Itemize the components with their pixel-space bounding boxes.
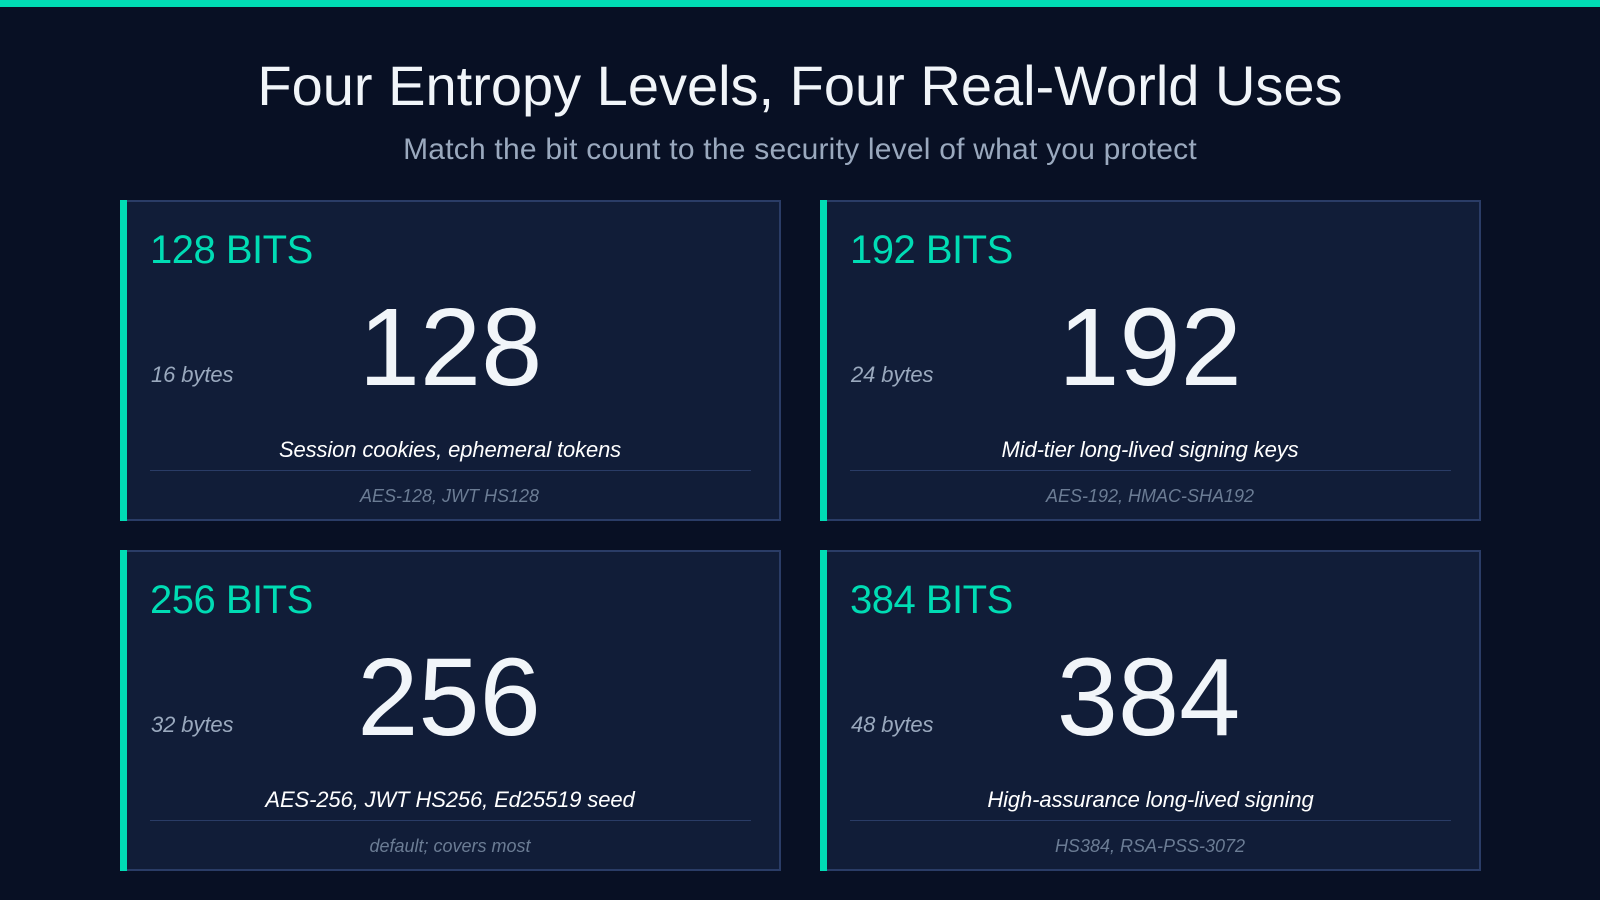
label: 192 bits: 192 BITS — [850, 228, 1013, 272]
byte size: 24 bytes: 24 bytes — [850, 362, 933, 387]
use description: Mid-tier long-lived signing keys — [1002, 437, 1299, 462]
algorithm note: AES-128, JWT HS128 — [359, 486, 539, 506]
big number: 256: 256 — [357, 636, 541, 759]
byte size: 48 bytes: 48 bytes — [851, 712, 933, 737]
label: 384 bits: 384 BITS — [850, 578, 1013, 622]
use description: Session cookies, ephemeral tokens — [279, 437, 621, 462]
big number: 128: 128 — [359, 286, 542, 409]
algorithm note: HS384, RSA-PSS-3072 — [1055, 836, 1245, 856]
panel: 384 bits — [820, 550, 1480, 871]
label: 256 bits: 256 BITS — [150, 578, 313, 622]
label: 128 bits: 128 BITS — [150, 228, 313, 272]
panel: 256 bits — [120, 550, 780, 871]
byte size: 32 bytes: 32 bytes — [151, 712, 233, 737]
panel: 128 bits — [120, 200, 780, 521]
use description: AES-256, JWT HS256, Ed25519 seed — [263, 787, 635, 812]
big number: 192: 192 — [1058, 286, 1242, 409]
algorithm note: AES-192, HMAC-SHA192 — [1045, 486, 1254, 506]
algorithm note: default; covers most — [369, 836, 532, 856]
title: Four Entropy Levels, Four Real-World Uses — [257, 54, 1343, 117]
use description: High-assurance long-lived signing — [987, 787, 1314, 812]
subtitle: Match the bit count to the security level of what you protect — [403, 133, 1197, 166]
top accent bar — [0, 0, 1600, 7]
big number: 384: 384 — [1057, 636, 1240, 759]
panel: 192 bits — [820, 200, 1480, 521]
byte size: 16 bytes: 16 bytes — [151, 362, 233, 387]
